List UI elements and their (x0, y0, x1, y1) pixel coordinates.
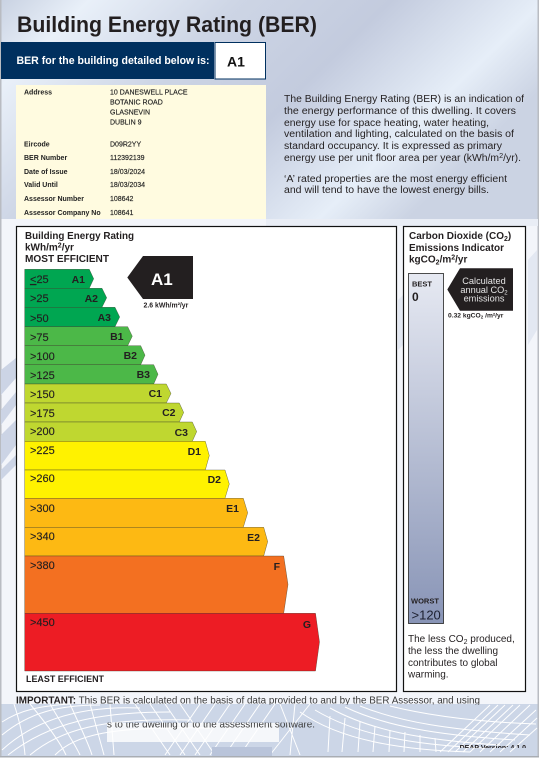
panel: CO2 indicator (404, 226, 526, 692)
CO2 heading: Carbon Dioxide (CO (409, 231, 504, 242)
banner: BER result (1, 42, 266, 79)
panel: building details: Address (24, 90, 52, 96)
panel: building details: 108642 (110, 196, 133, 203)
text block: BER explanation: ‘A’ rated properties are the most energy efficient (284, 174, 507, 185)
bar labels: grades: A2 (85, 293, 98, 305)
text block: BER explanation: the energy performance of this dwelling. It covers (284, 106, 516, 117)
banner: BER result: A1 (227, 54, 245, 70)
panel: building details: D09R2YY (110, 142, 141, 148)
rating arrow: A1 (127, 256, 193, 310)
CO2 arrow: 0.32 kgCO (448, 312, 481, 320)
CO2 arrow: 2 (504, 290, 508, 296)
CO2 heading: Emissions Indicator (409, 243, 504, 254)
panel: building details: 108641 (110, 210, 133, 217)
CO2 note (407, 634, 515, 680)
bar labels: grades: C3 (175, 427, 188, 439)
chart heading: MOST EFFICIENT (25, 254, 109, 265)
CO2 arrow: 2 (481, 314, 484, 320)
title: Building Energy Rating (BER) (17, 12, 317, 37)
CO2 heading: 2 (436, 260, 440, 266)
CO2 gauge: >120 (412, 608, 441, 622)
text block: BER explanation: and will tend to have the lowest energy bills. (284, 185, 489, 196)
bar labels: grades: D1 (188, 446, 201, 458)
least efficient label: LEAST EFFICIENT (26, 674, 104, 684)
text block: BER explanation: standard occupancy. It is expressed as primary (284, 141, 502, 152)
panel: building details: BER Number (24, 155, 67, 162)
bar labels: grades: B1 (110, 331, 124, 343)
bar labels: ranges: >225 (30, 445, 55, 457)
CO2 heading: 2 (451, 254, 455, 262)
CO2 note: the less the dwelling (408, 646, 498, 657)
bar labels: ranges (30, 274, 55, 629)
bar labels: ranges: >25 (30, 293, 49, 305)
panel: building details: Date of Issue (24, 169, 68, 176)
panel: building details: 10 DANESWELL PLACE (110, 90, 188, 96)
CO2 arrow: emissions (464, 294, 505, 304)
CO2 note: contributes to global (408, 658, 498, 669)
important note: s to the dwelling or to the assessment software. (107, 720, 315, 730)
bar labels: grades: C2 (162, 407, 176, 419)
panel: building details: BOTANIC ROAD (110, 100, 163, 106)
bar labels: ranges: >100 (30, 351, 55, 363)
bar labels: ranges: >175 (30, 408, 55, 420)
CO2 note: produced, (467, 634, 515, 645)
bar labels: ranges: >260 (30, 473, 55, 485)
panel: building details: 18/03/2024 (110, 169, 145, 176)
CO2 arrow: annual CO (460, 285, 504, 295)
bar labels: grades: A3 (98, 312, 111, 324)
bar labels: ranges: >450 (30, 617, 55, 629)
text block: BER explanation (284, 94, 524, 196)
panel: building details: Assessor Number (24, 196, 84, 203)
bar labels: grades (72, 274, 311, 631)
rating arrow: A1: 2.6 kWh/m²/yr (144, 302, 189, 310)
bar labels: grades: G (303, 619, 311, 631)
DEAP version: DEAP Version: 4.1.0 (460, 745, 526, 752)
CO2 note: The less CO (408, 634, 464, 645)
text block: BER explanation: 2 (499, 153, 503, 160)
CO2 gauge: WORST (411, 596, 439, 606)
bar labels: grades: A1 (72, 274, 85, 286)
chart heading: kWh/m (25, 242, 58, 254)
CO2 heading: /m (440, 254, 451, 266)
bar labels: ranges: <25 (30, 274, 49, 286)
panel: building details (16, 85, 266, 219)
text block: BER explanation: ventilation and lighting, calculated on the basis of (284, 129, 514, 140)
CO2 gauge (408, 274, 444, 624)
panel: building details: 18/03/2034 (110, 182, 145, 189)
rating bars (25, 269, 319, 671)
bar labels: ranges: >300 (30, 503, 55, 515)
bar labels: grades: E2 (247, 532, 260, 544)
CO2 heading: 2 (504, 236, 508, 243)
bar labels: ranges: >150 (30, 389, 55, 401)
bar labels: grades: E1 (226, 503, 239, 515)
CO2 heading: /yr (455, 254, 467, 266)
bar labels: grades: B3 (137, 369, 150, 381)
panel: building details: Valid Until (24, 182, 58, 189)
CO2 heading: kgCO (409, 254, 436, 266)
CO2 arrow (447, 268, 513, 320)
bar labels: grades: C1 (149, 388, 162, 400)
panel: building details: Assessor Company No (24, 210, 101, 217)
bar labels: ranges: >380 (30, 560, 55, 572)
rating arrow: A1: A1 (151, 270, 173, 289)
bar labels: grades: B2 (124, 350, 137, 362)
bar labels: ranges: >50 (30, 313, 49, 325)
CO2 gauge: 0 (412, 290, 419, 304)
panel: building details: 112392139 (110, 155, 145, 162)
important note: IMPORTANT: This BER is calculated on the basis of data provided to and by the BER Assessor, and using (16, 696, 480, 706)
panel: building details: GLASNEVIN (110, 110, 150, 116)
text block: BER explanation: energy use per unit floor area per year (kWh/m (284, 153, 491, 164)
CO2 note: warming. (407, 670, 449, 680)
CO2 heading (409, 231, 511, 266)
text block: BER explanation: The Building Energy Rating (BER) is an indication of (284, 94, 524, 105)
panel: building details: DUBLIN 9 (110, 120, 142, 126)
bar labels: ranges: >340 (30, 531, 55, 543)
chart heading (25, 231, 134, 265)
banner: BER result: BER for the building detailed below is: (16, 55, 210, 67)
chart heading: 2 (58, 242, 62, 250)
text block: BER explanation: /yr). (503, 153, 521, 164)
CO2 heading: ) (508, 231, 511, 242)
CO2 arrow: /m²/yr (483, 312, 504, 320)
bar labels: ranges: >125 (30, 370, 55, 382)
panel: energy rating chart (16, 226, 396, 692)
panel: building details: Eircode (24, 142, 50, 148)
bar labels: grades: F (274, 561, 281, 573)
text block: BER explanation: energy use for space heating, water heating, (284, 118, 489, 129)
bar labels: ranges: >75 (30, 332, 49, 344)
important note (16, 696, 480, 730)
chart heading: Building Energy Rating (25, 231, 134, 242)
bar labels: grades: D2 (208, 474, 221, 486)
CO2 arrow: Calculated (462, 276, 506, 286)
CO2 gauge: BEST (412, 280, 432, 288)
CO2 note: 2 (464, 639, 468, 646)
chart heading: /yr (62, 242, 74, 254)
bar labels: ranges: >200 (30, 426, 55, 438)
